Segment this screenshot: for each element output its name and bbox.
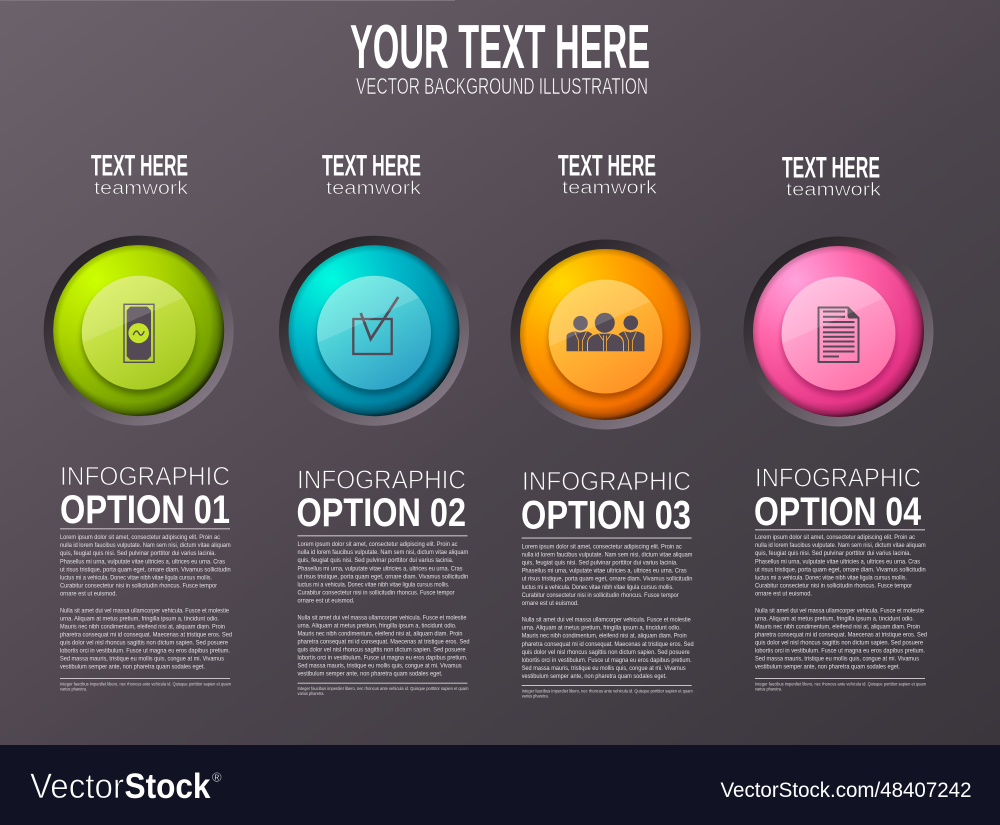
panel: column 4 [744,151,934,692]
text: option 03: ornare est ut euismod. [522,600,579,607]
text: option 04: ut risus tristique, porta quam eget, ornare diam. Vivamus sollicitudin [755,566,926,573]
text: option 01: INFOGRAPHIC [60,463,230,491]
text: option 01: Integer faucibus imperdiet libero, nec rhoncus ante vehicula id. Quisque porttitor sapien et quam [60,682,231,686]
image id: VectorStock.com/48407242 [720,779,972,802]
heading: column 2: TEXT HERE [322,150,421,183]
text: option 03: Mauris nec nibh condimentum, eleifend nisi at, aliquam diam. Proin [522,633,687,640]
text: option 01: luctus mi a vehicula. Donec vitae nibh vitae ligula cursus mollis. [60,574,212,582]
footer banner [0,745,1000,825]
text: option 03: varius pharetra. [522,694,549,699]
icon: money [124,304,154,362]
text: option 02: urna. Aliquam at metus pretium, fringilla ipsum a, tincidunt odio. [298,622,457,629]
text: option 02: Sed massa mauris, tristique eu mollis quis, congue at mi. Vivamus [298,663,462,670]
heading: column 4: TEXT HERE [782,151,880,184]
text: option 04: Nulla sit amet dui vel massa ullamcorper vehicula. Fusce et molestie [755,607,924,614]
text: option 04: quis dolor vel nisl rhoncus sagittis non dictum sapien. Sed posuere [755,640,923,646]
text: option 01: ut risus tristique, porta quam eget, ornare diam. Vivamus sollicitudin [60,566,231,573]
text: option 01: quis, feugiat quis nisi. Sed pulvinar porttitor dui varius lacinia. [60,550,216,557]
text: option 04: Sed massa mauris, tristique eu mollis quis, congue at mi. Vivamus [755,656,920,663]
text: option 04: ornare est ut euismod. [755,591,812,598]
heading: column 1: TEXT HERE [91,150,188,183]
heading: column 2: teamwork [326,178,422,198]
text: option 02: Integer faucibus imperdiet libero, nec rhoncus ante vehicula id. Quisque porttitor sapien et quam [298,686,469,691]
panel: column 1 [44,150,234,691]
text: option 04: varius pharetra. [755,686,782,692]
title: YOUR TEXT HERE [350,13,650,82]
button: orange with team icon [510,240,700,430]
text: option 04: OPTION 04 [754,490,921,534]
title [350,13,650,99]
title: VECTOR BACKGROUND ILLUSTRATION [356,73,648,99]
text: option 01: pharetra consequat mi id consequat. Maecenas at tristique eros. Sed [60,632,232,638]
text: option 03: nulla id lorem faucibus vulputate. Nam sem nisi, dictum vitae aliquam [522,551,693,558]
text: option 03: Lorem ipsum dolor sit amet, consectetur adipiscing elit. Proin ac [522,543,682,550]
text: option 01: urna. Aliquam at metus pretium, fringilla ipsum a, tincidunt odio. [60,615,219,622]
text: option 04: quis, feugiat quis nisi. Sed pulvinar porttitor dui varius lacinia. [755,550,911,557]
text: option 01: Mauris nec nibh condimentum, eleifend nisi at, aliquam diam. Proin [60,623,225,630]
logo: VectorStock [30,767,222,806]
text: option 02: OPTION 02 [296,491,466,535]
text: option 03: lobortis orci in vestibulum. Fusce ut magna eu eros dapibus pretium. [522,657,692,664]
text: option 03: urna. Aliquam at metus pretium, fringilla ipsum a, tincidunt odio. [522,625,681,632]
panel: column 2 [279,150,470,696]
text: option 04: lobortis orci in vestibulum. Fusce ut magna eu eros dapibus pretium. [755,648,925,655]
text: option 02: Lorem ipsum dolor sit amet, consectetur adipiscing elit. Proin ac [298,541,458,548]
text: option 02: varius pharetra. [298,691,324,696]
text: option 04: urna. Aliquam at metus pretium, fringilla ipsum a, tincidunt odio. [755,615,914,622]
text: option 03: OPTION 03 [521,493,691,537]
text: option 01: vestibulum semper ante, non pharetra quam sodales eget. [60,664,205,671]
text: option 04: Curabitur consectetur nisi in sollicitudin rhoncus. Fusce tempor [755,583,913,590]
icon: team [566,313,644,351]
text: option 03: pharetra consequat mi id consequat. Maecenas at tristique eros. Sed [522,641,694,648]
text: option 04: Mauris nec nibh condimentum, eleifend nisi at, aliquam diam. Proin [755,623,920,630]
text: option 02: pharetra consequat mi id consequat. Maecenas at tristique eros. Sed [298,638,470,646]
text: option 02: lobortis orci in vestibulum. Fusce ut magna eu eros dapibus pretium. [298,655,468,662]
button: green with money icon [44,236,234,426]
text: option 01: Lorem ipsum dolor sit amet, consectetur adipiscing elit. Proin ac [60,534,221,541]
text: option 04: nulla id lorem faucibus vulputate. Nam sem nisi, dictum vitae aliquam [755,542,926,549]
heading: column 1 [91,150,189,198]
icon: checkbox [353,297,398,354]
text: option 02 [296,466,470,696]
text: option 03 [521,468,694,698]
heading: column 4 [782,151,882,199]
heading: column 1: teamwork [94,178,189,198]
logo: VectorStock: ® [212,770,222,784]
text: option 01: ornare est ut euismod. [60,591,117,598]
button: pink with document icon [744,236,934,426]
text: option 01: Phasellus mi urna, vulputate vitae ultricies a, ultrices eu urna. Cras [60,558,226,565]
heading: column 3 [558,150,658,198]
text: option 01 [60,463,232,692]
text: option 02: luctus mi a vehicula. Donec vitae nibh vitae ligula cursus mollis. [298,582,450,588]
text: option 04: Lorem ipsum dolor sit amet, consectetur adipiscing elit. Proin ac [755,534,916,541]
text: option 04: vestibulum semper ante, non pharetra quam sodales eget. [755,664,900,671]
text: option 02: quis, feugiat quis nisi. Sed pulvinar porttitor dui varius lacinia. [298,557,454,564]
text: option 03: Integer faucibus imperdiet libero, nec rhoncus ante vehicula id. Quisque porttitor sapien et quam [522,689,693,694]
text: option 03: Sed massa mauris, tristique eu mollis quis, congue at mi. Vivamus [522,665,686,672]
text: option 04: pharetra consequat mi id consequat. Maecenas at tristique eros. Sed [755,632,927,638]
text: option 03: quis dolor vel nisl rhoncus sagittis non dictum sapien. Sed posuere [522,649,690,656]
text: option 03: ut risus tristique, porta quam eget, ornare diam. Vivamus sollicitudin [522,576,693,583]
text: option 02: Phasellus mi urna, vulputate vitae ultricies a, ultrices eu urna. Cras [298,565,463,572]
text: option 01: Nulla sit amet dui vel massa ullamcorper vehicula. Fusce et molestie [60,607,229,614]
icon: document [818,308,859,362]
text: option 03: vestibulum semper ante, non pharetra quam sodales eget. [522,673,667,680]
logo: VectorStock: Vector [30,767,124,806]
text: option 01: varius pharetra. [60,686,87,692]
text: option 02: Mauris nec nibh condimentum, eleifend nisi at, aliquam diam. Proin [298,630,463,637]
text: option 01: Sed massa mauris, tristique eu mollis quis, congue at mi. Vivamus [60,656,225,663]
text: option 02: nulla id lorem faucibus vulputate. Nam sem nisi, dictum vitae aliquam [298,549,469,556]
text: option 01: OPTION 01 [60,488,230,532]
text: option 02: vestibulum semper ante, non pharetra quam sodales eget. [298,671,443,678]
text: option 01: quis dolor vel nisl rhoncus sagittis non dictum sapien. Sed posuere [60,640,228,646]
heading: column 2 [322,150,422,198]
text: option 01: Curabitur consectetur nisi in sollicitudin rhoncus. Fusce tempor [60,583,218,590]
button: teal with checkbox icon [279,236,469,426]
text: option 02: Nulla sit amet dui vel massa ullamcorper vehicula. Fusce et molestie [298,614,467,621]
panel: column 3 [510,150,700,698]
text: option 03: quis, feugiat quis nisi. Sed pulvinar porttitor dui varius lacinia. [522,560,678,567]
heading: column 4: teamwork [786,179,882,199]
text: option 02: Curabitur consectetur nisi in sollicitudin rhoncus. Fusce tempor [298,590,455,597]
text: option 02: quis dolor vel nisl rhoncus sagittis non dictum sapien. Sed posuere [298,646,466,654]
text: option 03: Curabitur consectetur nisi in sollicitudin rhoncus. Fusce tempor [522,592,679,599]
text: option 02: INFOGRAPHIC [297,466,466,494]
logo: VectorStock: Stock [124,767,211,806]
text: option 04: luctus mi a vehicula. Donec vitae nibh vitae ligula cursus mollis. [755,574,907,582]
text: option 01: nulla id lorem faucibus vulputate. Nam sem nisi, dictum vitae aliquam [60,542,231,549]
text: option 03: Nulla sit amet dui vel massa ullamcorper vehicula. Fusce et molestie [522,617,691,624]
text: option 02: ornare est ut euismod. [298,598,355,605]
text: option 01: lobortis orci in vestibulum. Fusce ut magna eu eros dapibus pretium. [60,648,230,655]
text: option 03: luctus mi a vehicula. Donec vitae nibh vitae ligula cursus mollis. [522,584,674,591]
heading: column 3: teamwork [562,178,658,198]
text: option 03: INFOGRAPHIC [522,468,691,496]
heading: column 3: TEXT HERE [558,150,656,183]
text: option 03: Phasellus mi urna, vulputate vitae ultricies a, ultrices eu urna. Cras [522,568,687,575]
text: option 04 [754,465,927,692]
text: option 02: ut risus tristique, porta quam eget, ornare diam. Vivamus sollicitudin [298,573,468,580]
text: option 04: Integer faucibus imperdiet libero, nec rhoncus ante vehicula id. Quisque porttitor sapien et quam [755,682,926,686]
text: option 04: INFOGRAPHIC [755,465,921,493]
text: option 04: Phasellus mi urna, vulputate vitae ultricies a, ultrices eu urna. Cras [755,558,921,565]
